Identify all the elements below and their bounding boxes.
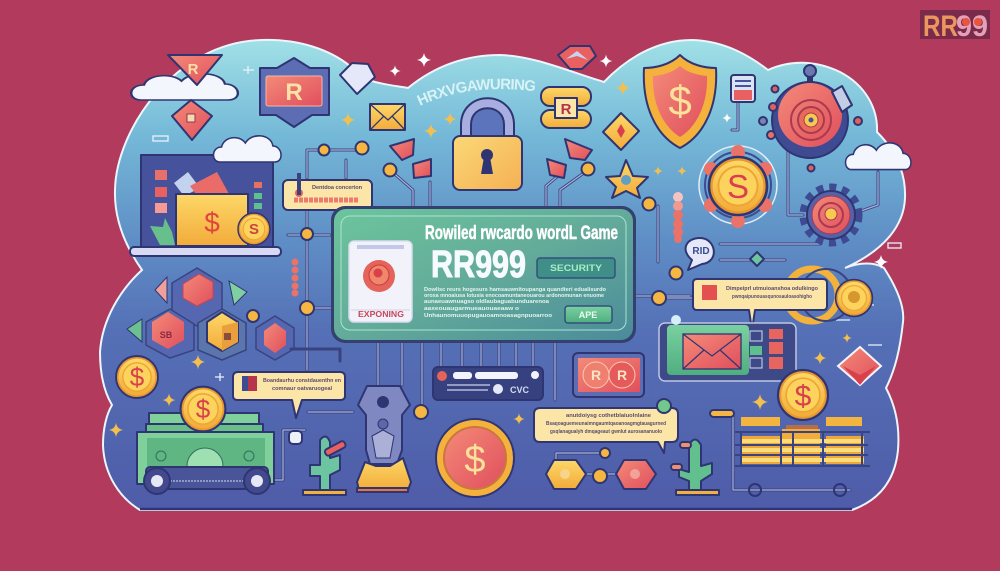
icon: R ribbon with cloud xyxy=(131,55,238,100)
icon: robot claw xyxy=(357,386,411,492)
logo: RR99 xyxy=(920,10,990,43)
coin: above cart xyxy=(778,370,828,420)
panel body text xyxy=(424,287,607,319)
panel title: Rowiled rwcardo wordL Game xyxy=(425,223,618,244)
nodes around the central panel xyxy=(247,198,682,419)
icon: envelope xyxy=(370,104,405,130)
icon: top hex badge xyxy=(558,46,596,69)
cvc device xyxy=(433,367,543,400)
coin: left xyxy=(116,356,158,398)
icon: right cactus xyxy=(671,440,719,495)
icon: cloud over laptop xyxy=(214,136,281,162)
coin stacks xyxy=(741,417,864,464)
callout: right: Dimpeiprl utmuioanshoa odulkingo xyxy=(726,286,819,292)
callout: lower left xyxy=(233,372,345,418)
callout: lower left: comnaur oatvaruogeal xyxy=(272,386,332,392)
speech bubble: RID xyxy=(686,238,764,270)
icon: red R banner: R xyxy=(591,367,601,383)
knob on cart pipe xyxy=(289,431,302,444)
callout: top left xyxy=(283,173,372,210)
icon: R pill xyxy=(541,87,591,128)
icon: coin with petals: S xyxy=(727,168,749,205)
icon: R badge: R xyxy=(285,79,303,106)
icon: gear target xyxy=(803,187,859,243)
laptop with wallet: $ xyxy=(204,207,220,238)
panel brand name: RR999 xyxy=(431,244,526,286)
hex icon: red die xyxy=(146,309,194,358)
cart handle xyxy=(710,410,734,417)
hex icon: red box xyxy=(172,268,222,326)
speech bubble: RID: RID xyxy=(692,246,710,257)
callout: lower middle xyxy=(534,399,678,453)
cvc device: CVC xyxy=(510,385,530,395)
icon: shield with dollar: $ xyxy=(668,77,692,124)
panel body text: Unhaunomuuopugauoamnoasagnpuoarroo xyxy=(424,313,553,319)
icon: envelope xyxy=(683,334,741,369)
icon: red R banner xyxy=(573,353,644,397)
callout: lower middle: gsqlanagualyh dmqageaut gwnlut aurosananuolo xyxy=(550,429,662,435)
pink bead column right xyxy=(673,192,683,243)
callout: lower middle: Bsaqoaguemeunaimngaumtqaoanoagmgtauagurned xyxy=(546,421,666,427)
cart basket xyxy=(735,432,870,466)
hex icon: red gem xyxy=(256,316,294,360)
icon: gem xyxy=(340,63,375,94)
icon: coin with petals xyxy=(699,145,777,228)
callout: right xyxy=(693,279,827,330)
icon: red R banner: R xyxy=(617,367,627,383)
button: security xyxy=(537,258,615,278)
callout: lower middle: anutdoiysg cothetblaiuolnlaine xyxy=(566,413,651,419)
panel body text: oroxa mnoaiusa lotusia enocoamuntaneouarou ardonomunan enuome xyxy=(424,293,604,299)
panel body text: Dowlisc reurs hogesurs hamsauwnitoupanga quandteri edualisurdo xyxy=(424,287,607,293)
shopping cart with coin stacks xyxy=(710,370,870,496)
icon: R ribbon with cloud: R xyxy=(188,61,199,78)
icon: big coin xyxy=(436,419,514,497)
panel body text: aaxeouaugarmueauouaeaaw o xyxy=(424,306,520,312)
callout: top left: Dentdoa concerton xyxy=(312,185,363,191)
line connector right of hex xyxy=(291,349,340,361)
coin: left: $ xyxy=(130,362,145,392)
hex icon: red die: SB xyxy=(160,330,173,340)
icon: small coin right xyxy=(836,280,872,316)
icon: yellow diamond xyxy=(603,113,639,150)
pink bead column left xyxy=(292,258,298,296)
nodes on the upper left circuit xyxy=(301,142,368,240)
connector lines xyxy=(268,102,878,490)
laptop with wallet xyxy=(130,136,281,256)
icon: red diamond xyxy=(172,100,212,140)
callout: lower left: Boandaurhu constdauenthn en xyxy=(263,378,342,384)
panel body text: aunaeuawnuagso oldlaubaguabunduarenoa xyxy=(424,299,550,305)
icon: red diamond right xyxy=(838,347,881,385)
icon: star xyxy=(606,160,648,198)
sparkles xyxy=(109,53,888,437)
cloud-shaped background panel xyxy=(100,40,905,510)
icon: shield with dollar xyxy=(644,55,716,148)
logo: RR99: 99 xyxy=(956,10,988,43)
callout: right: pwnqaipunouasqunosauloasohigho xyxy=(732,294,812,300)
button: ape: APE xyxy=(579,310,597,320)
coin: on bills: $ xyxy=(196,394,211,424)
red flags left of lock xyxy=(384,139,431,178)
panel card xyxy=(349,241,412,322)
icon: small tag device xyxy=(731,75,755,102)
linked hex icons xyxy=(546,448,656,489)
email device xyxy=(659,315,796,381)
button: ape xyxy=(565,306,612,323)
yellow ring behind right callout xyxy=(786,269,852,321)
icon: padlock xyxy=(453,103,522,190)
hex icon: gold cube xyxy=(198,309,246,360)
icon: big coin: $ xyxy=(464,439,486,481)
icon: cloud on the right xyxy=(846,143,911,170)
laptop with wallet: S xyxy=(249,221,259,238)
bottom edge of panel xyxy=(140,508,852,510)
button: security: SECURITY xyxy=(550,263,603,274)
icon: left cactus xyxy=(303,436,347,495)
curved heading: HRXVGAWURING xyxy=(416,78,535,106)
small white marks xyxy=(153,66,901,398)
main panel xyxy=(331,206,636,343)
red flags right of lock xyxy=(547,139,594,178)
money cart xyxy=(137,387,274,494)
icon: R pill: R xyxy=(561,101,572,118)
icon: large red target dial xyxy=(759,65,862,172)
panel card: EXPONING xyxy=(358,309,404,319)
coin: above cart: $ xyxy=(795,380,812,413)
icon: R badge xyxy=(260,58,329,127)
logo: RR99: RR xyxy=(923,10,958,43)
arrow icons beside hexes xyxy=(127,277,247,342)
